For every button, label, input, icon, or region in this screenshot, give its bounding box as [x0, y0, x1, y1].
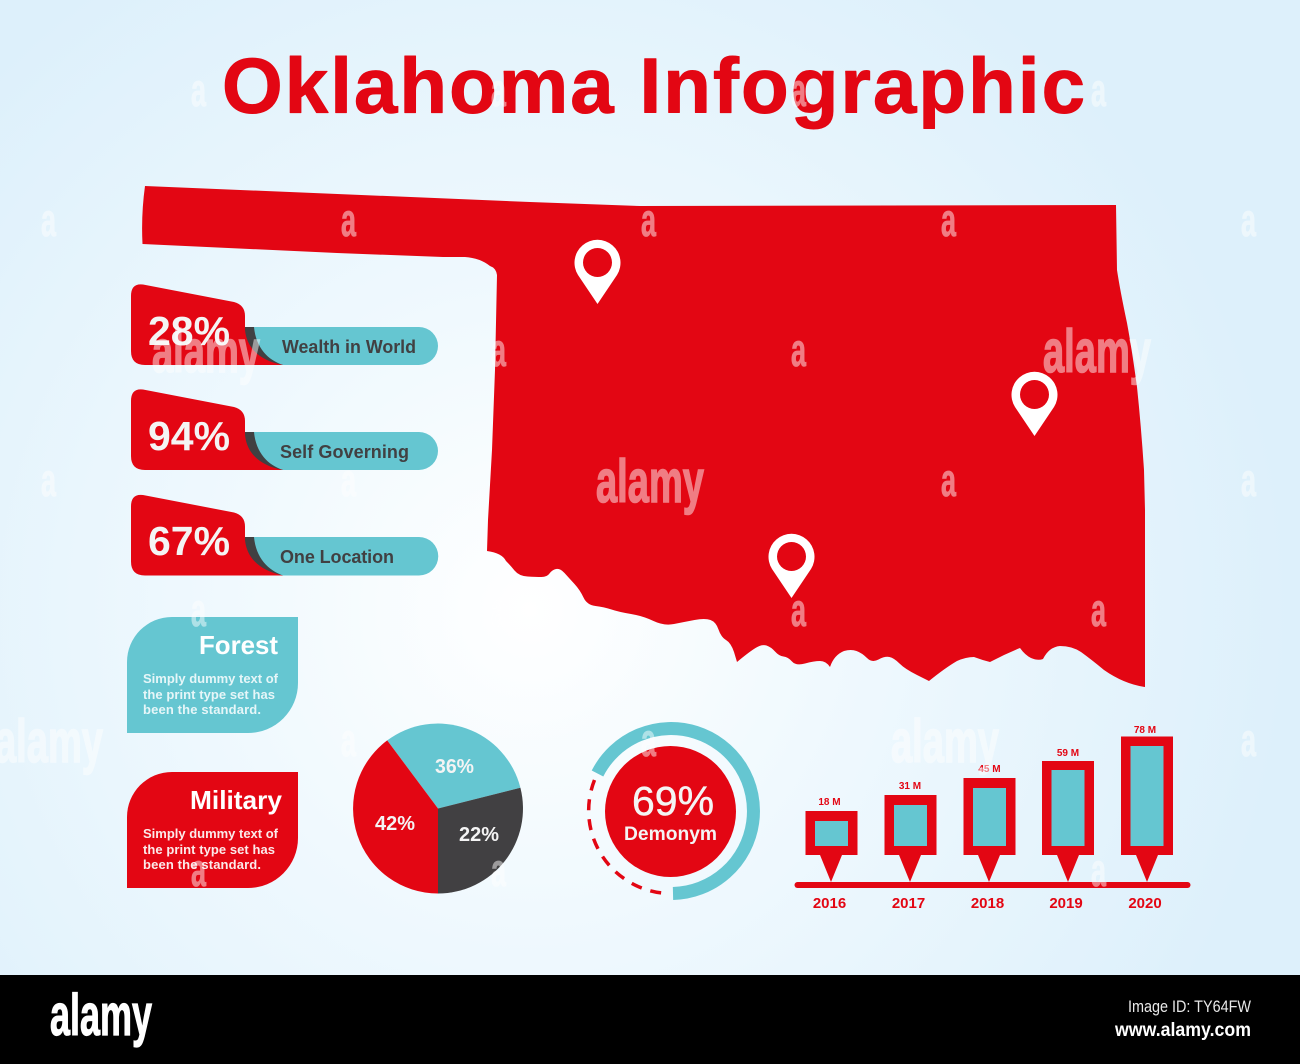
watermark: stock agency marks: a [491, 844, 506, 896]
watermark: stock agency marks: a [191, 844, 206, 896]
bar chart: yearly values: 2018 [971, 895, 1004, 912]
watermark: stock agency marks: a [41, 454, 56, 506]
donut gauge: demonym [589, 729, 753, 894]
watermark: stock agency marks: a [491, 324, 506, 376]
panel: military: the print type set has [143, 842, 275, 857]
bar chart: yearly values: 2017 [892, 895, 925, 912]
watermark: stock agency marks: a [641, 194, 656, 246]
watermark: stock agency marks: a [341, 194, 356, 246]
donut gauge: demonym: Demonym [624, 824, 717, 845]
panel: forest: Forest [199, 630, 278, 660]
bar chart: yearly values: 2020 [1128, 895, 1162, 912]
watermark: stock agency marks: a [341, 454, 356, 506]
watermark: stock agency marks: a [491, 584, 506, 636]
map: Oklahoma [142, 186, 1145, 687]
pie chart: 22% [459, 824, 499, 846]
stat banner: self governing: Self Governing [280, 442, 409, 462]
panel: forest [127, 617, 298, 733]
watermark: stock agency marks: a [491, 64, 506, 116]
stat banner: self governing: 94% [148, 413, 230, 459]
watermark: stock agency marks: a [791, 64, 806, 116]
watermark: stock agency marks: a [641, 714, 656, 766]
stat banner: wealth in world: 28% [148, 308, 230, 354]
bar chart: yearly values: 18 M [818, 797, 841, 808]
bar chart: yearly values: 2019 [1049, 895, 1083, 912]
watermark: stock agency marks: a [1241, 194, 1256, 246]
footer bar [0, 975, 1300, 1064]
stat banner: one location: One Location [280, 547, 394, 567]
panel: military [127, 772, 298, 888]
watermark: stock agency marks: a [941, 194, 956, 246]
watermark: stock agency marks: alamy [891, 708, 999, 775]
watermark: stock agency marks: a [191, 64, 206, 116]
watermark: stock agency marks: a [341, 714, 356, 766]
bar chart: yearly values: 2016 [813, 895, 846, 912]
pie chart [353, 724, 523, 894]
watermark: stock agency marks: a [1091, 844, 1106, 896]
watermark: stock agency marks: a [1241, 714, 1256, 766]
stat banner: wealth in world: Wealth in World [282, 337, 416, 357]
watermark: stock agency marks: alamy [1043, 318, 1151, 385]
watermark: stock agency marks: a [1091, 64, 1106, 116]
map pin: north [574, 240, 620, 304]
panel: forest: been the standard. [143, 702, 261, 717]
bar chart: yearly values: 59 M [1057, 748, 1079, 759]
watermark: stock agency marks: alamy [596, 448, 704, 515]
map pin: east [1012, 372, 1058, 436]
watermark: stock agency marks: a [41, 194, 56, 246]
footer bar: www.alamy.com [1114, 1020, 1251, 1041]
watermark: stock agency marks: a [1241, 454, 1256, 506]
watermark: stock agency marks: a [1091, 584, 1106, 636]
watermark: stock agency marks: a [941, 454, 956, 506]
bar chart: yearly values [794, 725, 1190, 912]
footer bar: alamy [50, 983, 152, 1048]
panel: military: Simply dummy text of [143, 826, 279, 841]
bar chart: yearly values: 31 M [899, 781, 921, 792]
pie chart: 36% [435, 756, 474, 778]
bar chart: yearly values: 45 M [978, 764, 1001, 775]
pie chart: 42% [375, 813, 415, 835]
stat banner: self governing [131, 389, 438, 470]
bar chart: yearly values: 78 M [1134, 725, 1156, 736]
stat banner: one location: 67% [148, 518, 230, 564]
panel: military: Military [190, 785, 283, 815]
panel: military: been the standard. [143, 857, 261, 872]
panel: forest: the print type set has [143, 687, 275, 702]
watermark: stock agency marks: a [191, 584, 206, 636]
watermark: stock agency marks [0, 64, 1256, 896]
stat banner: wealth in world [131, 284, 438, 365]
stat banner: one location [131, 495, 438, 576]
watermark: stock agency marks: a [791, 584, 806, 636]
watermark: stock agency marks: alamy [152, 318, 260, 385]
map pin: south [768, 534, 814, 598]
watermark: stock agency marks: alamy [0, 708, 103, 775]
footer bar: Image ID: TY64FW [1128, 997, 1251, 1016]
watermark: stock agency marks: a [791, 324, 806, 376]
donut gauge: demonym: 69% [632, 778, 714, 824]
title: Oklahoma Infographic [222, 42, 1085, 130]
panel: forest: Simply dummy text of [143, 671, 279, 686]
